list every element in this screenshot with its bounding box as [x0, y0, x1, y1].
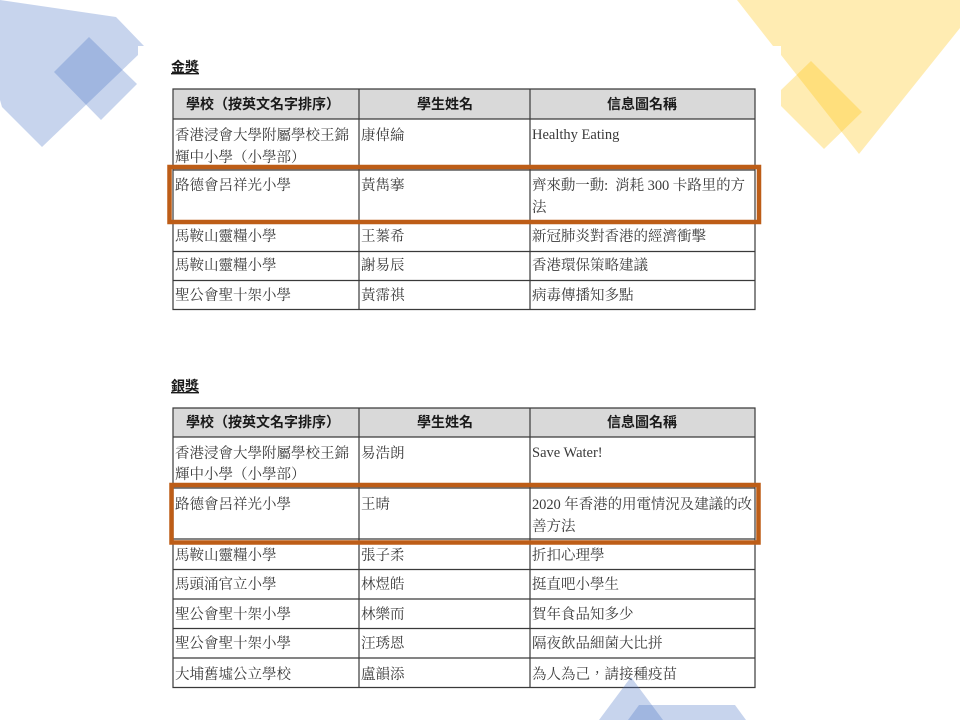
- silver award table: 為人為己，請接種疫苗: [532, 665, 677, 683]
- gold award table: 信息圖名稱: [607, 96, 677, 112]
- silver award table: 賀年食品知多少: [532, 605, 634, 623]
- silver award heading: 銀獎: [171, 378, 199, 394]
- gold award table: 謝易辰: [361, 257, 404, 274]
- silver award table: 隔夜飲品細菌大比拼: [532, 634, 663, 652]
- silver award table: 盧韻添: [361, 665, 405, 683]
- gold award table: 香港浸會大學附屬學校王錦: [175, 126, 349, 144]
- gold award table: 王蓁希: [361, 227, 404, 245]
- gold award table: 馬鞍山靈糧小學: [175, 257, 276, 274]
- silver award table: 學生姓名: [417, 414, 473, 430]
- gold award table: 康倬綸: [361, 127, 405, 144]
- silver award table: 輝中小學（小學部）: [175, 466, 306, 483]
- gold award table: 齊來動一動: 消耗 300 卡路里的方: [532, 176, 745, 194]
- gold award heading: 金獎: [171, 59, 199, 75]
- gold award table: Healthy Eating: [532, 127, 619, 143]
- gold highlight box: [170, 167, 759, 222]
- silver award table: 馬頭涌官立小學: [175, 576, 276, 593]
- gold award table: 黃霈祺: [361, 286, 405, 304]
- silver award table: 張子柔: [361, 547, 404, 564]
- silver award table: 林樂而: [361, 606, 404, 623]
- silver award table: 汪琇恩: [361, 635, 405, 652]
- gold award table: 香港環保策略建議: [532, 257, 648, 274]
- silver award table: 易浩朗: [361, 445, 404, 462]
- silver award table: [173, 408, 755, 688]
- gold award table: 聖公會聖十架小學: [175, 286, 291, 304]
- silver award table: 善方法: [532, 518, 576, 535]
- silver award table: 路德會呂祥光小學: [175, 496, 291, 513]
- gold award table: 黃雋搴: [361, 176, 405, 194]
- gold award table: 學生姓名: [417, 96, 473, 112]
- silver award table: 聖公會聖十架小學: [175, 634, 291, 652]
- gold award table: 新冠肺炎對香港的經濟衝擊: [532, 227, 706, 245]
- silver award table: 學校（按英文名字排序）: [186, 414, 340, 430]
- gold award table: 輝中小學（小學部）: [175, 149, 306, 166]
- silver award table: 2020 年香港的用電情況及建議的改: [532, 495, 752, 513]
- gold award table: 馬鞍山靈糧小學: [175, 228, 276, 245]
- decoration: yellow shapes top right: [737, 0, 960, 154]
- silver award table: 聖公會聖十架小學: [175, 605, 291, 623]
- silver award table: 香港浸會大學附屬學校王錦: [175, 444, 349, 462]
- silver award table: 信息圖名稱: [607, 414, 677, 430]
- gold award table: 學校（按英文名字排序）: [186, 96, 340, 112]
- silver award table: 折扣心理學: [532, 547, 604, 564]
- gold award table: 法: [532, 199, 547, 216]
- silver highlight box: [172, 485, 758, 542]
- silver award table: 馬鞍山靈糧小學: [175, 547, 276, 564]
- gold award table: [173, 89, 755, 310]
- decoration: blue shapes bottom: [599, 677, 746, 720]
- gold award table: 路德會呂祥光小學: [175, 177, 291, 194]
- silver award table: 林煜皓: [361, 576, 405, 593]
- silver award table: 王晴: [361, 495, 390, 513]
- decoration: blue shapes top left: [0, 0, 144, 147]
- silver award table: Save Water!: [532, 445, 603, 461]
- silver award table: 大埔舊墟公立學校: [175, 665, 291, 683]
- silver award table: 挺直吧小學生: [532, 575, 619, 593]
- gold award table: 病毒傳播知多點: [532, 287, 634, 304]
